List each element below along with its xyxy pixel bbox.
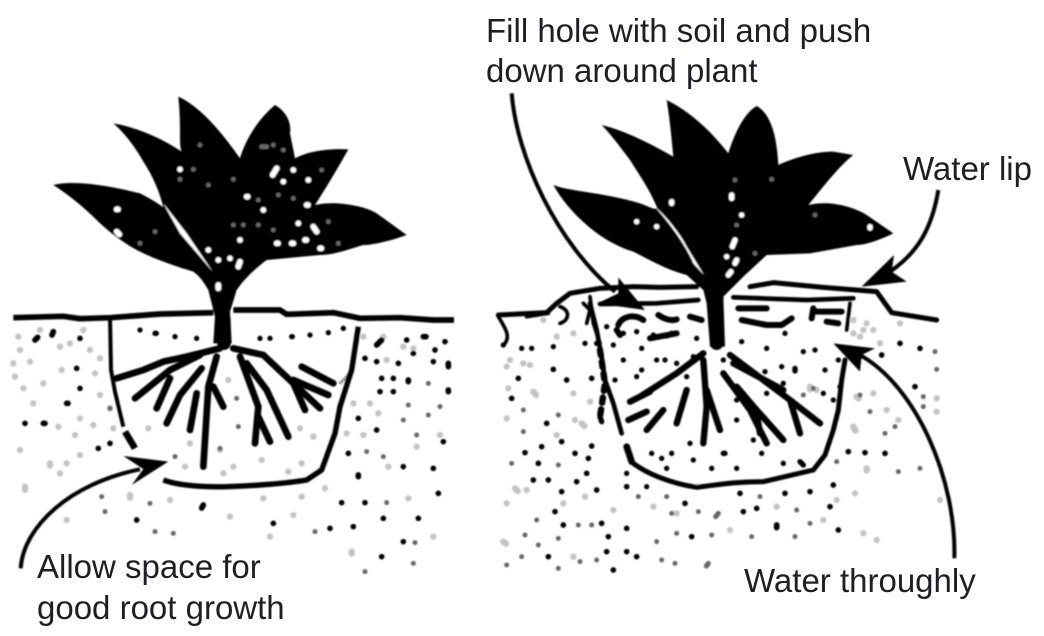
panel: plant before filling hole (13, 97, 454, 626)
arrowhead: water lip (862, 255, 907, 287)
panel: plant after filling hole (486, 12, 1032, 599)
leaf sliver left (163, 203, 213, 272)
ground line left (13, 310, 454, 320)
left plant illustration (13, 97, 454, 572)
label: water throughly: Water throughly (744, 562, 976, 599)
leaves right (553, 100, 893, 347)
soil mound texture (498, 297, 850, 343)
arrow: fill hole (512, 93, 645, 310)
stipple inside hole (503, 327, 840, 487)
arrow: water thoroughly (833, 343, 954, 558)
arrow: water lip (862, 190, 938, 287)
surface lumps (617, 308, 842, 338)
soil stipple right (503, 320, 940, 570)
leaf sliver right (653, 205, 704, 275)
arrowhead: allow space (123, 456, 168, 485)
right plant illustration (498, 93, 954, 570)
leaf speckles right (637, 195, 870, 275)
arrowhead: fill hole (597, 277, 645, 310)
soil stipple left (13, 328, 448, 572)
ground line right (498, 283, 937, 343)
planting hole outline right (590, 303, 845, 487)
label: fill hole line 1: Fill hole with soil and push (486, 12, 871, 49)
label: allow space: Allow space for (37, 548, 261, 585)
label: water lip: Water lip (903, 150, 1032, 187)
roots left (117, 320, 333, 467)
label: fill hole line 2: down around plant (486, 52, 758, 89)
planting hole outline left (110, 317, 358, 487)
leaf speckles left (117, 168, 321, 288)
leaves left (53, 97, 407, 343)
arrowhead: water thoroughly (833, 343, 875, 372)
label: root growth: good root growth (37, 589, 285, 626)
roots right (628, 280, 820, 443)
arrow: allow space (21, 456, 168, 568)
